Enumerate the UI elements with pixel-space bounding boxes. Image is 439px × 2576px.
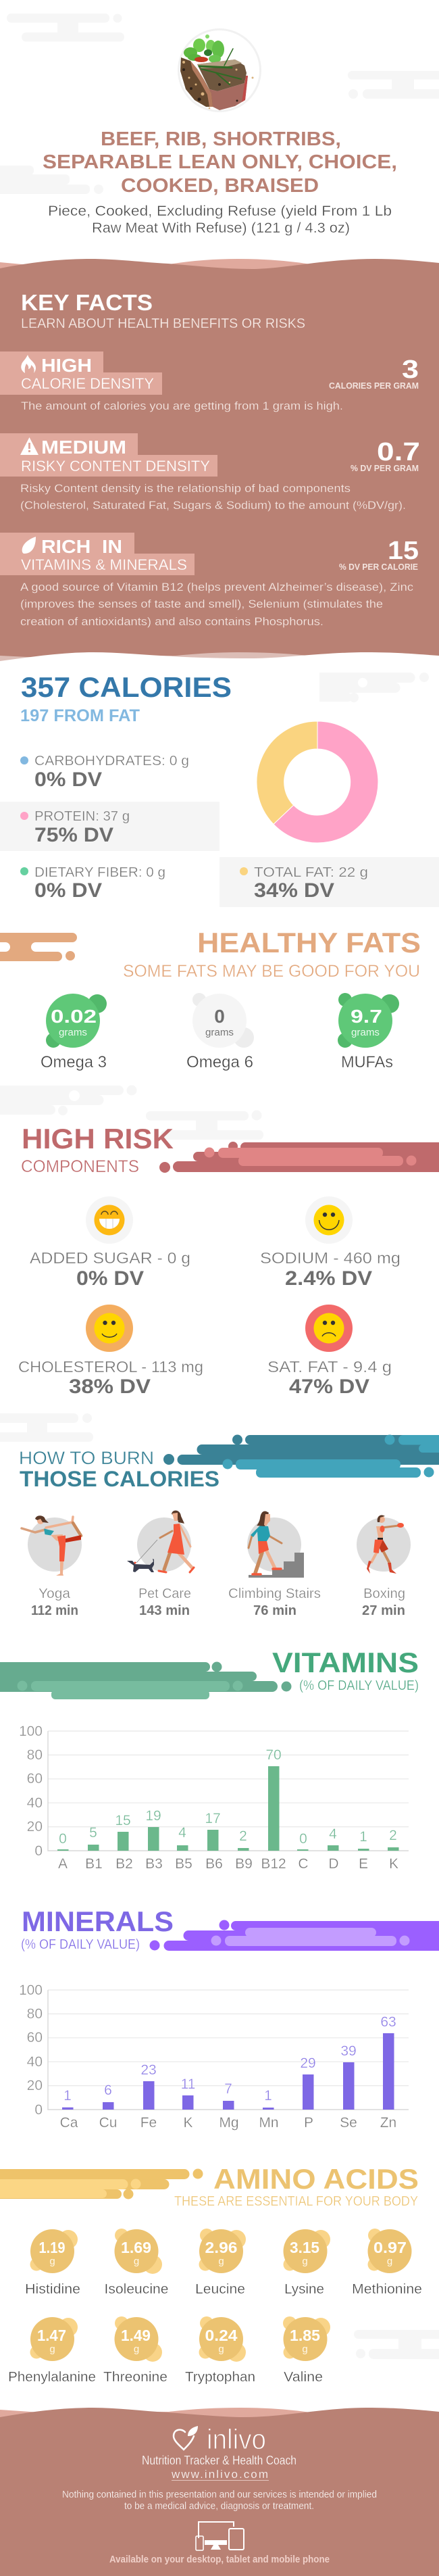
stat: dietary fiber — [20, 865, 165, 902]
decoration: fats banner — [0, 933, 77, 961]
bar chart: minerals: Mg — [219, 2115, 239, 2131]
subtitle — [48, 203, 392, 236]
logo: inlivo heart: inlivo — [207, 2423, 266, 2455]
stat: methionine: g — [387, 2256, 392, 2267]
stat: histidine: Histidine — [25, 2282, 80, 2297]
stat: total fat: 34% DV — [254, 879, 334, 902]
header — [0, 14, 439, 236]
stat: omega 6 — [186, 993, 254, 1071]
label: calorie density: CALORIE DENSITY — [21, 375, 154, 392]
bar chart: minerals: Fe — [140, 2115, 157, 2131]
decoration: vitamins banner — [0, 1661, 292, 1699]
stat: threonine — [103, 2316, 167, 2385]
bar chart: vitamins: B6 — [205, 1856, 223, 1872]
heading: how to burn: THOSE CALORIES — [20, 1467, 220, 1491]
panel: how to burn those calories — [19, 1434, 439, 1618]
stat: methionine: 0.97 — [373, 2239, 407, 2256]
stat: protein — [0, 802, 220, 851]
stat: cholesterol: CHOLESTEROL - 113 mg — [18, 1358, 203, 1376]
footer — [0, 2408, 439, 2576]
activity: yoga: Yoga — [38, 1586, 71, 1601]
icon: leaf — [22, 537, 36, 554]
bar chart: vitamins: 70 — [265, 1747, 282, 1763]
bar chart: vitamins: B1 — [85, 1856, 103, 1872]
heading: healthy fats — [123, 927, 421, 981]
bar chart: vitamins: 20 — [27, 1819, 43, 1834]
stat: tryptophan: Tryptophan — [185, 2370, 255, 2385]
stat: carbohydrates — [20, 754, 189, 791]
stat: mufas — [338, 993, 399, 1071]
value: 0.7 dv per gram: % DV PER GRAM — [351, 463, 419, 473]
subtitle: Piece, Cooked, Excluding Refuse (yield From 1 Lb — [48, 203, 392, 219]
title: COOKED, BRAISED — [121, 175, 319, 197]
bar chart: minerals: K — [183, 2115, 193, 2131]
icon: warning — [20, 437, 38, 455]
stat: lysine — [284, 2229, 330, 2297]
bar chart: minerals: 7 — [224, 2081, 232, 2097]
stat: phenylalanine: Phenylalanine — [8, 2370, 96, 2385]
activity: pet care: 143 min — [139, 1603, 190, 1618]
stat: isoleucine: Isoleucine — [104, 2282, 169, 2297]
stat: lysine: g — [302, 2256, 308, 2267]
decoration: burn banner — [163, 1434, 439, 1478]
bar chart: vitamins: 0 — [34, 1843, 43, 1859]
value: 15 dv per calorie: % DV PER CALORIE — [339, 562, 418, 572]
heading: high risk — [21, 1123, 174, 1176]
stat: tryptophan: 0.24 — [205, 2327, 238, 2344]
bar chart: vitamins: 4 — [329, 1826, 337, 1842]
stat: valine — [283, 2316, 330, 2385]
stat: leucine — [195, 2229, 246, 2297]
bar chart: vitamins: C — [298, 1856, 309, 1872]
bar chart: minerals: 20 — [27, 2078, 43, 2093]
panel: high risk components — [18, 1123, 439, 1398]
fact: calorie density — [0, 351, 419, 412]
bar chart: minerals: 60 — [27, 2030, 43, 2045]
heading: how to burn — [19, 1448, 220, 1491]
stat: histidine: 1.19 — [39, 2239, 65, 2256]
stat: phenylalanine: g — [49, 2343, 55, 2355]
heading: amino acids: AMINO ACIDS — [213, 2163, 419, 2195]
stat: threonine: Threonine — [103, 2370, 167, 2385]
donut chart — [257, 721, 378, 843]
label: rich in: RICH IN — [41, 536, 122, 557]
stat: omega 3: Omega 3 — [41, 1053, 107, 1071]
decoration: high risk banner — [159, 1142, 439, 1173]
stat: total fat: TOTAL FAT: 22 g — [254, 865, 368, 880]
stat: tryptophan: g — [218, 2343, 224, 2355]
bar chart: vitamins: 0 — [299, 1831, 307, 1847]
stat: phenylalanine: 1.47 — [37, 2327, 66, 2344]
stat: protein: PROTEIN: 37 g — [34, 809, 130, 824]
stat: lysine: Lysine — [284, 2282, 324, 2297]
stat: threonine: 1.49 — [121, 2327, 151, 2344]
bar chart: vitamins: 15 — [115, 1813, 131, 1828]
value: 0.7 dv per gram: 0.7 — [377, 438, 420, 466]
bar chart: vitamins: B9 — [235, 1856, 253, 1872]
activity: boxing: 27 min — [362, 1603, 405, 1618]
activity: yoga: 112 min — [31, 1603, 78, 1618]
bar chart: minerals: 63 — [380, 2014, 396, 2030]
value: 0.7 dv per gram — [351, 438, 420, 473]
stat: omega 3: 0.02 — [51, 1006, 97, 1027]
bar chart: minerals: 80 — [27, 2006, 43, 2022]
bar chart: minerals: 40 — [27, 2054, 43, 2070]
logo: inlivo heart — [174, 2423, 266, 2455]
heading: minerals — [21, 1905, 174, 1952]
stat: mufas: 9.7 — [351, 1006, 382, 1027]
value: 15 dv per calorie: 15 — [388, 537, 419, 565]
stat: omega 3 — [41, 994, 107, 1071]
bar chart: vitamins: 0 — [59, 1831, 67, 1847]
panel: calories — [0, 671, 439, 907]
heading: calories: 357 CALORIES — [21, 671, 232, 703]
heading: key facts: KEY FACTS — [21, 290, 153, 315]
stat: cholesterol: 38% DV — [69, 1376, 151, 1398]
stat: added sugar: ADDED SUGAR - 0 g — [30, 1249, 190, 1267]
bar chart: vitamins: A — [58, 1856, 68, 1872]
panel: healthy fats — [0, 927, 421, 1071]
bar chart: vitamins: 5 — [89, 1825, 97, 1841]
bar chart: minerals: 1 — [264, 2088, 272, 2104]
bar chart: vitamins: K — [389, 1856, 398, 1872]
bar chart: minerals: 1 — [63, 2088, 72, 2104]
stat: sodium: 2.4% DV — [285, 1267, 372, 1290]
stat: mufas: MUFAs — [341, 1053, 393, 1071]
stat: saturated fat: SAT. FAT - 9.4 g — [267, 1358, 392, 1376]
stat: protein: 75% DV — [34, 824, 113, 846]
stat: methionine: Methionine — [352, 2282, 422, 2297]
stat: dietary fiber: DIETARY FIBER: 0 g — [34, 865, 165, 880]
food photo: steak — [178, 30, 261, 111]
heading: minerals: MINERALS — [22, 1905, 174, 1937]
label: high: HIGH — [41, 355, 92, 376]
description: Risky Content density is the relationship of bad components — [20, 483, 351, 495]
value: 3 calories per gram — [329, 356, 419, 391]
heading: vitamins — [272, 1647, 419, 1693]
stat: isoleucine: g — [134, 2256, 139, 2267]
disclaimer: to be a medical advice, diagnosis or treatment. — [124, 2501, 314, 2512]
stat: valine: g — [302, 2343, 308, 2355]
heading: vitamins: (% OF DAILY VALUE) — [299, 1678, 419, 1693]
bar chart: minerals: Mn — [259, 2115, 279, 2131]
bar chart: vitamins: 40 — [27, 1795, 43, 1811]
label: medium: MEDIUM — [41, 437, 126, 458]
activity: climbing stairs — [228, 1511, 321, 1618]
bar chart: vitamins: B12 — [261, 1856, 286, 1872]
stat: phenylalanine — [8, 2317, 96, 2385]
bar chart: vitamins: B3 — [145, 1856, 163, 1872]
heading: healthy fats: HEALTHY FATS — [197, 927, 421, 958]
bar chart: vitamins: 19 — [145, 1808, 161, 1824]
stat: mufas: grams — [351, 1027, 380, 1038]
stat: cholesterol — [18, 1305, 203, 1398]
heading: key facts — [21, 290, 305, 331]
label: vitamins and minerals: VITAMINS & MINERALS — [21, 556, 187, 573]
bar chart: minerals: Cu — [99, 2115, 117, 2131]
description: (improves the senses of taste and smell), Selenium (stimulates the — [20, 598, 383, 610]
panel: vitamins — [0, 1647, 419, 1872]
panel: minerals — [19, 1905, 439, 2131]
bar chart: vitamins: B5 — [175, 1856, 192, 1872]
subtitle: Raw Meat With Refuse) (121 g / 4.3 oz) — [92, 220, 350, 236]
stat: omega 6: Omega 6 — [186, 1053, 253, 1071]
heading: how to burn: HOW TO BURN — [19, 1448, 154, 1468]
stat: omega 6: 0 — [214, 1006, 225, 1027]
bar chart: minerals: Ca — [60, 2115, 78, 2131]
bar chart: minerals: 0 — [34, 2102, 43, 2118]
heading: vitamins: VITAMINS — [272, 1647, 419, 1678]
bar chart: minerals: 39 — [340, 2043, 357, 2059]
heading: calories: 197 FROM FAT — [20, 706, 140, 725]
heading: amino acids — [174, 2163, 419, 2209]
bar chart: minerals: 100 — [19, 1983, 43, 1998]
title — [43, 128, 397, 197]
stat: sodium — [260, 1196, 401, 1290]
description: creation of antioxidants) and also contains Phosphorus. — [20, 616, 324, 628]
bar chart: minerals — [19, 1983, 409, 2131]
fact: risky content density — [0, 433, 420, 512]
activity: boxing — [357, 1515, 411, 1618]
bar chart: minerals: 11 — [181, 2076, 195, 2092]
stat: leucine: 2.96 — [205, 2239, 238, 2256]
stat: histidine — [25, 2229, 80, 2297]
value: 3 calories per gram: CALORIES PER GRAM — [329, 381, 419, 391]
bar chart: vitamins: E — [359, 1856, 368, 1872]
heading: calories — [20, 671, 232, 725]
activity: pet care: Pet Care — [138, 1586, 191, 1601]
title: BEEF, RIB, SHORTRIBS, — [101, 128, 341, 150]
stat: lysine: 3.15 — [290, 2239, 319, 2256]
heading: amino acids: THESE ARE ESSENTIAL FOR YOUR BODY — [174, 2194, 418, 2209]
icon: flame — [21, 355, 36, 373]
description: (Cholesterol, Saturated Fat, Sugars & Sodium) to the amount (%DV/gr). — [20, 500, 406, 512]
label: risky content density: RISKY CONTENT DENSITY — [21, 458, 210, 475]
heading: minerals: (% OF DAILY VALUE) — [21, 1937, 140, 1952]
bar chart: vitamins: 4 — [178, 1825, 186, 1841]
stat: omega 3: grams — [59, 1027, 87, 1038]
stat: leucine: g — [218, 2256, 224, 2267]
disclaimer: Nothing contained in this presentation and our services is intended or implied — [62, 2489, 377, 2500]
website link: www.inlivo.com — [171, 2468, 268, 2481]
stat: leucine: Leucine — [195, 2282, 245, 2297]
stat: threonine: g — [134, 2343, 139, 2355]
bar chart: minerals: 6 — [104, 2083, 112, 2098]
stat: total fat — [220, 857, 439, 907]
description — [20, 581, 413, 628]
heading: healthy fats: SOME FATS MAY BE GOOD FOR YOU — [123, 962, 420, 981]
stat: isoleucine — [104, 2229, 169, 2297]
bar chart: vitamins: D — [328, 1856, 339, 1872]
description: A good source of Vitamin B12 (helps prevent Alzheimer’s disease), Zinc — [20, 581, 413, 593]
stat: histidine: g — [49, 2256, 55, 2267]
stat: added sugar: 0% DV — [76, 1267, 144, 1290]
stat: carbohydrates: 0% DV — [34, 769, 102, 791]
stat: valine: Valine — [284, 2370, 323, 2385]
bar chart: minerals: Zn — [380, 2115, 396, 2131]
stat: isoleucine: 1.69 — [121, 2239, 151, 2256]
decoration: minerals banner — [150, 1920, 439, 1951]
stat: valine: 1.85 — [290, 2327, 320, 2344]
bar chart: vitamins: 1 — [359, 1829, 367, 1845]
bar chart: minerals: 23 — [140, 2062, 157, 2078]
bar chart: minerals: P — [304, 2115, 313, 2131]
stat: tryptophan — [185, 2316, 255, 2385]
fact: rich in vitamins and minerals — [0, 533, 419, 628]
heading: high risk: HIGH RISK — [22, 1123, 174, 1155]
bar chart: vitamins: 60 — [27, 1771, 43, 1787]
icon: devices — [196, 2522, 244, 2550]
bar chart: vitamins: 80 — [27, 1747, 43, 1763]
bar chart: vitamins: 2 — [239, 1828, 247, 1844]
activity: climbing stairs: 76 min — [253, 1603, 296, 1618]
bar chart: vitamins — [19, 1724, 409, 1872]
bar chart: vitamins: 17 — [205, 1811, 221, 1826]
description: The amount of calories you are getting from 1 gram is high. — [21, 400, 343, 412]
stat: dietary fiber: 0% DV — [34, 879, 102, 902]
value: 15 dv per calorie — [339, 537, 419, 572]
activity: yoga — [22, 1515, 82, 1618]
stat: methionine — [352, 2229, 422, 2297]
stat: carbohydrates: CARBOHYDRATES: 0 g — [34, 754, 189, 769]
panel: key facts — [0, 259, 439, 671]
bar chart: vitamins: 100 — [19, 1724, 43, 1739]
activity: pet care — [127, 1511, 194, 1618]
panel: amino acids — [0, 2163, 422, 2385]
tagline: Nutrition Tracker & Health Coach — [142, 2454, 296, 2467]
value: 3 calories per gram: 3 — [402, 356, 419, 384]
title: SEPARABLE LEAN ONLY, CHOICE, — [43, 151, 397, 173]
stat: sodium: SODIUM - 460 mg — [260, 1249, 401, 1267]
disclaimer — [62, 2489, 377, 2512]
description — [20, 483, 406, 512]
activity: boxing: Boxing — [363, 1586, 405, 1601]
availability note: Available on your desktop, tablet and mobile phone — [109, 2554, 330, 2565]
stat: saturated fat: 47% DV — [289, 1376, 369, 1398]
decoration: amino banner — [0, 2168, 203, 2200]
bar chart: vitamins: B2 — [115, 1856, 133, 1872]
heading: high risk: COMPONENTS — [21, 1157, 139, 1176]
stat: omega 6: grams — [205, 1027, 234, 1038]
stat: added sugar — [30, 1196, 190, 1290]
heading: key facts: LEARN ABOUT HEALTH BENEFITS OR RISKS — [21, 316, 305, 331]
bar chart: vitamins: 2 — [389, 1828, 397, 1843]
stat: saturated fat — [267, 1305, 392, 1398]
activity: climbing stairs: Climbing Stairs — [228, 1586, 321, 1601]
bar chart: minerals: Se — [340, 2115, 357, 2131]
bar chart: minerals: 29 — [300, 2056, 316, 2071]
